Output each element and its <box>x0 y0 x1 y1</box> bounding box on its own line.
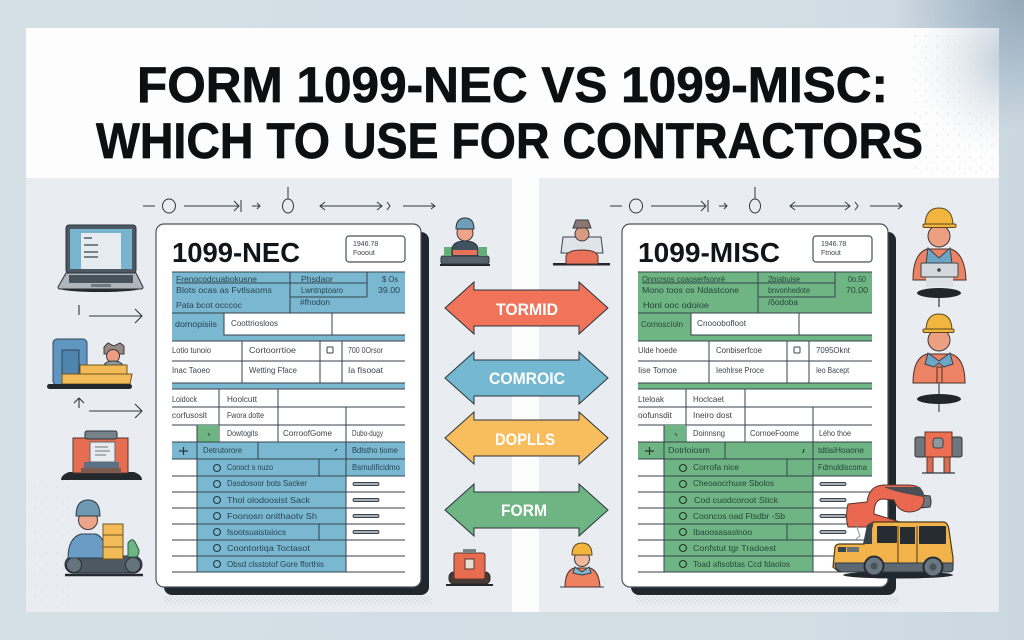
blue header block: $ Os <box>382 274 398 284</box>
icon: worker at desk <box>47 339 132 389</box>
white details rows: Fwora dotte <box>227 410 264 420</box>
icon: worker with tablet <box>913 208 966 307</box>
form date box <box>346 236 405 262</box>
arrow: FORM: FORM <box>501 501 547 520</box>
blue header block <box>172 272 405 341</box>
green header block: Honl ooc odoioe <box>643 300 709 310</box>
flow connectors: right <box>610 187 902 213</box>
center white divider <box>512 178 539 612</box>
blue header block: Frenocodcuabokusne <box>176 274 257 284</box>
white details rows: Iise Tomoe <box>638 365 677 375</box>
green header block: Cornoscíoln <box>641 319 683 329</box>
blue checklist block: fsootsuaistaiocs <box>227 527 286 537</box>
form date box: 1946.78 <box>353 241 378 248</box>
blue header block: #fhodon <box>300 297 330 307</box>
decorative dots left <box>26 480 71 610</box>
blue header block: Lwntnptoaro <box>301 285 343 295</box>
blue checklist block: Bdtstho tiome <box>352 445 398 455</box>
blue header block: Coottriosloos <box>231 318 278 328</box>
form date box <box>813 236 872 262</box>
blue checklist block: Dasdosoor bots Sacker <box>227 478 307 488</box>
green header block: 0o.50 <box>848 274 866 284</box>
form date box: Ftnout <box>821 250 841 257</box>
white details rows: Ia fIsooat <box>348 365 384 375</box>
green checklist block: Dotrloiosm <box>668 445 710 455</box>
green checklist block: Fdmuldiscoma <box>818 462 867 472</box>
green checklist block: Ibaoosasaslnoo <box>693 527 752 537</box>
white details rows: Lotio tunoio <box>172 345 211 355</box>
halftone strip <box>636 596 898 604</box>
panel: 1099-MISC form <box>622 224 898 604</box>
icon: laptop <box>58 225 143 292</box>
arrow: left upper <box>79 305 142 323</box>
white details rows: Ieo Bacept <box>816 365 850 375</box>
icon: red printing machine <box>61 431 142 480</box>
white details rows: Hoclcaet <box>693 394 725 404</box>
green header block: Mono toos os Ndastcone <box>642 285 739 295</box>
icon: worker with hard hat <box>913 314 965 412</box>
icon: red machine bottom centre <box>446 549 493 586</box>
white details rows: Lteloak <box>638 394 665 404</box>
form heading: 1099-MISC <box>638 237 780 268</box>
green checklist block: Confstut tgr Tradoest <box>693 543 777 553</box>
green checklist block: Cooncos oad Ftsdbr -Sb <box>693 511 785 521</box>
arrow: COMROIC: COMROIC <box>489 369 565 388</box>
form date box: 1946.78 <box>821 241 846 248</box>
arrow: COMROIC <box>445 352 608 404</box>
white details rows: oofunsdit <box>638 410 673 420</box>
arrow: left lower <box>74 398 142 418</box>
title panel <box>26 28 999 178</box>
white details rows: Doinnsng <box>693 428 725 438</box>
green header block: Cnooobofloot <box>697 318 747 328</box>
green header block: 70.00 <box>846 285 868 295</box>
green checklist block: Corrofa nice <box>693 462 739 472</box>
white details rows: Ulde hoede <box>638 345 677 355</box>
card shadow <box>164 232 429 595</box>
blue header block: Phsdaor <box>301 274 333 284</box>
blue checklist block: Foonosn onlthaotv Sh <box>227 511 317 521</box>
white details rows: 700 0Orsor <box>348 345 383 355</box>
blue header block: 39.00 <box>378 285 400 295</box>
card <box>622 224 888 587</box>
green header block: bnvonhedote <box>768 285 810 295</box>
blue header block: Pata bcot occcoc <box>176 300 243 310</box>
icon: worker top centre left <box>440 218 490 266</box>
arrow: DOPLLS <box>445 412 608 464</box>
icon: worker with boxes <box>65 500 143 575</box>
green checklist block: Toad afisobtas Ccd fdaolos <box>693 559 790 569</box>
blue checklist block: Conoct s nuzo <box>227 462 273 472</box>
green checklist block: tdtisiHoaone <box>818 445 864 455</box>
blue checklist block: Obsd clsstotof Gore fforthis <box>227 559 324 569</box>
card <box>156 224 421 587</box>
blue checklist block <box>172 442 405 572</box>
white details rows: Lého thoe <box>819 428 851 438</box>
blue checklist block: Bsmulificidmo <box>352 462 400 472</box>
blue header block: Blots ocas as Fvtlsaoms <box>176 285 272 295</box>
white details rows: Ineiro dost <box>693 410 733 420</box>
white details rows <box>638 341 872 442</box>
white details rows: Dubo-dugy <box>352 428 384 438</box>
arrow: TORMID <box>445 282 608 334</box>
form heading: 1099-NEC <box>172 237 300 268</box>
white details rows: Loidock <box>172 394 198 404</box>
title <box>96 57 923 169</box>
blue checklist block: Coontortiqa Toctasot <box>227 543 311 553</box>
white details rows: Conbiserfcoe <box>716 345 762 355</box>
icon: red robot machine <box>915 432 962 473</box>
white details rows: Cortoorrtioe <box>249 345 296 355</box>
icon: operator top centre right <box>553 220 610 266</box>
white details rows: Ieohlrse Proce <box>716 365 764 375</box>
white details rows: Inac Taoeo <box>172 365 210 375</box>
green header block <box>638 272 872 341</box>
green header block: /ôodoba <box>768 297 798 307</box>
white details rows: CorroofGome <box>283 428 332 438</box>
blue checklist block: Detrutorore <box>203 445 242 455</box>
card shadow <box>631 232 896 595</box>
icon: yellow vehicle with red crane <box>833 485 953 578</box>
white details rows: Hoolcutt <box>227 394 258 404</box>
halftone strip <box>164 596 432 604</box>
icon: worker bottom centre <box>560 543 604 587</box>
white details rows: corfusoslt <box>172 410 208 420</box>
white details rows <box>172 341 405 442</box>
arrow: FORM <box>445 484 608 536</box>
panel: 1099-NEC form <box>156 224 432 604</box>
panel: left background <box>26 178 512 612</box>
white details rows: Wetting Fface <box>249 365 297 375</box>
green header block: 2biabuise <box>768 274 800 284</box>
arrow: DOPLLS: DOPLLS <box>495 430 555 449</box>
form date box: Fooout <box>353 250 375 257</box>
white details rows: Dowtogits <box>227 428 258 438</box>
green checklist block: Cheoaocrhuxe Sbolos <box>693 478 774 488</box>
panel: right background <box>539 178 999 612</box>
title: FORM 1099-NEC VS 1099-MISC: <box>137 57 888 113</box>
white details rows: CornoeFoome <box>750 428 799 438</box>
flow connectors: left <box>143 187 435 213</box>
green header block: Onncrsos coaoserfsonré <box>642 274 725 284</box>
arrow: TORMID: TORMID <box>496 300 558 319</box>
white details rows: 7095Oknt <box>816 345 851 355</box>
title: WHICH TO USE FOR CONTRACTORS <box>96 113 923 169</box>
green checklist block: Cod cuodcoroot Stick <box>694 495 779 505</box>
green checklist block <box>638 442 872 572</box>
blue header block: domopisiis <box>175 319 217 329</box>
blue checklist block: Thol olodoosist Sack <box>227 495 311 505</box>
